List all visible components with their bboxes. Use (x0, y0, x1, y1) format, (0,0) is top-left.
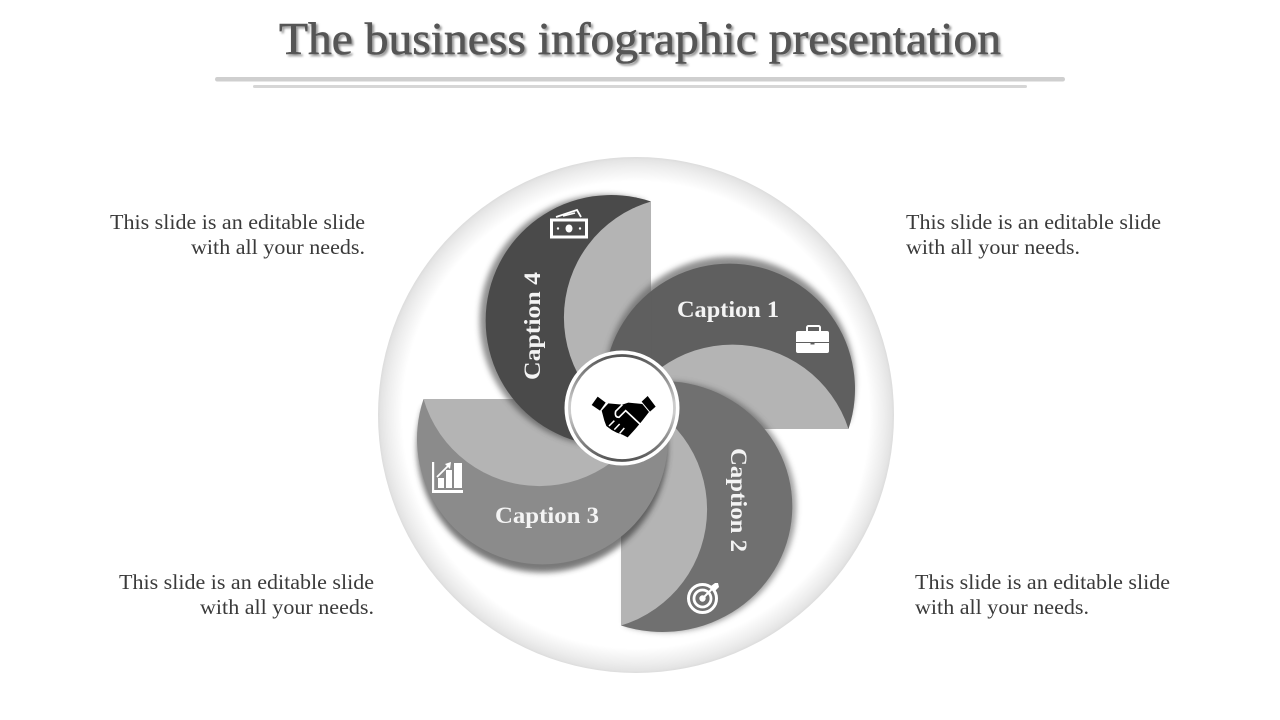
outer ring (378, 157, 894, 673)
text block: top right: This slide is an editable slide (906, 210, 1161, 234)
text block: top left: with all your needs. (191, 235, 365, 259)
text block: top left: This slide is an editable slide (110, 210, 365, 234)
icon: briefcase (796, 326, 829, 353)
text block: top right (906, 210, 1161, 259)
text block: bottom right: with all your needs. (915, 595, 1089, 619)
center hub (564, 350, 680, 466)
text block: bottom right (915, 570, 1170, 619)
blade: caption 4 (480, 195, 651, 446)
blade: caption 1 (604, 257, 855, 429)
icon: banknotes (552, 210, 586, 237)
text block: bottom left: This slide is an editable slide (119, 570, 374, 594)
caption 2 label: Caption 2 (726, 448, 751, 552)
blade 1 overlap over blade 4 (604, 281, 651, 358)
blade: caption 3 (417, 399, 668, 572)
text block: bottom left (119, 570, 374, 619)
text block: top left (110, 210, 365, 259)
title: The business infographic presentation (279, 13, 1001, 64)
title underline (215, 77, 1065, 88)
icon: growth chart (432, 462, 463, 493)
icon: handshake (592, 396, 656, 437)
blade: caption 2 (621, 381, 796, 632)
text block: bottom left: with all your needs. (200, 595, 374, 619)
icon: target (688, 583, 719, 612)
text block: top right: with all your needs. (906, 235, 1080, 259)
caption 4 label: Caption 4 (520, 271, 545, 380)
caption 1 label: Caption 1 (677, 297, 779, 322)
text block: bottom right: This slide is an editable slide (915, 570, 1170, 594)
caption 3 label: Caption 3 (495, 503, 599, 528)
